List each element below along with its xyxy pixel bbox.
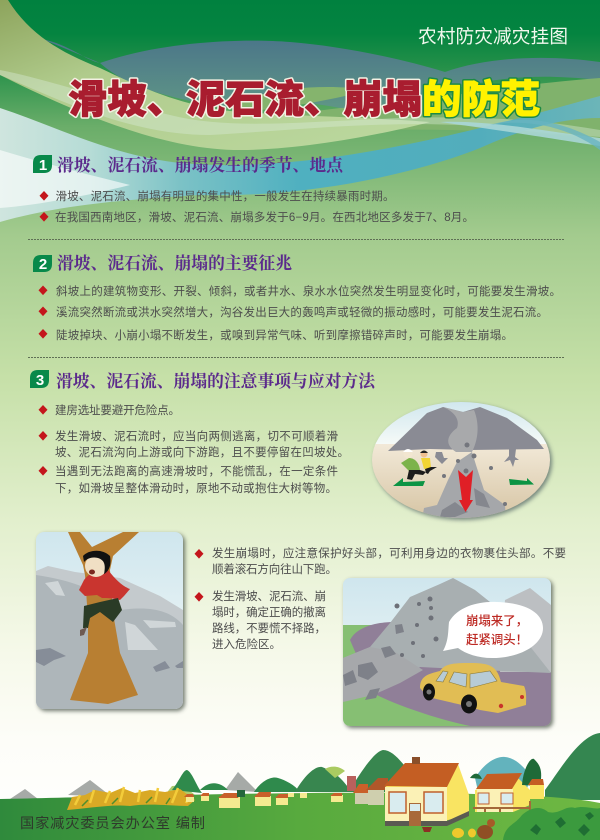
title: 的防范 [422,79,540,122]
small houses [184,776,388,808]
bullets right [194,546,566,651]
bullets 1: 在我国西南地区，滑坡、泥石流、崩塌多发于6−9月。在西北地区多发于7、8月。 [55,210,474,224]
main house [384,757,469,826]
background waves [0,0,600,222]
bullets 2: 斜坡上的建筑物变形、开裂、倾斜，或者井水、泉水水位突然发生明显变化时，可能要发生滑坡。 [56,284,561,298]
heading 1: 滑坡、泥石流、崩塌发生的季节、地点 [57,155,344,175]
section 2 [33,253,561,342]
title: 滑坡、泥石流、崩塌 [68,79,422,122]
section 3 [30,370,376,495]
section 1 [33,155,474,224]
car [420,663,526,714]
bullets 3 left: 下，如滑坡呈整体滑动时，原地不动或抱住大树等物。 [55,481,337,495]
village footer [0,733,600,840]
mountain [36,566,183,709]
bullets 3 left: 当遇到无法跑离的高速滑坡时，不能慌乱，在一定条件 [55,464,338,478]
bullets right: 发生滑坡、泥石流、崩 [212,589,326,603]
debris [422,452,506,520]
bullets 1: 滑坡、泥石流、崩塌有明显的集中性，一般发生在持续暴雨时期。 [56,189,394,203]
badge 1: 1 [39,157,47,174]
boulder figures [435,449,519,467]
bullets 3 left: 发生滑坡、泥石流时，应当向两侧逃离，切不可顺着滑 [55,429,338,443]
road [350,622,551,726]
speech bubble [443,602,543,658]
mud flow [443,407,478,452]
bullets right: 顺着滚石方向往山下跑。 [212,562,337,576]
bullets right: 塌时，确定正确的撤离 [212,605,326,619]
bullets right: 路线，不要慌不择路， [212,621,326,635]
bullets 2 [38,284,561,342]
heading 3: 滑坡、泥石流、崩塌的注意事项与应对方法 [56,371,376,391]
mountain [388,407,544,451]
bullets 3 left [38,403,349,495]
mountain [500,588,551,672]
bullets 3 left: 建房选址要避开危险点。 [55,403,180,417]
second house [470,759,544,817]
bullets 3 left: 坡、泥石流沟向上游或向下游跑，且不要停留在凹坡处。 [55,445,349,459]
green arrow right [509,478,534,485]
speech bubble: 赶紧调头！ [466,632,528,647]
bullets right: 发生崩塌时，应注意保护好头部，可利用身边的衣物裹住头部。不要 [212,546,566,560]
green arrow left [393,478,425,486]
series label: 农村防灾减灾挂图 [418,26,568,47]
bullets 1 [40,189,474,224]
bullets 2: 陡坡掉块、小崩小塌不断发生，或嗅到异常气味、听到摩擦错碎声时，可能要发生崩塌。 [56,328,513,342]
runners [401,449,437,480]
red arrow [458,470,473,512]
title: 滑坡、泥石流、崩塌 [68,79,422,122]
heading 2: 滑坡、泥石流、崩塌的主要征兆 [57,253,292,273]
badge 3 [30,370,49,389]
bullets right: 进入危险区。 [212,637,281,651]
speech bubble: 崩塌来了， [466,613,528,628]
badge 2: 2 [39,256,47,273]
tree [68,532,139,704]
bushes [503,807,600,840]
illustration: hugging a tree [36,532,185,711]
chickens [422,819,495,839]
distant hills [10,733,600,800]
badge 1 [33,155,52,174]
person [79,570,130,600]
badge 3: 3 [36,372,44,389]
illustration: landslide escape [370,400,554,520]
ground [0,793,600,840]
badge 2 [33,255,52,273]
bullets 2: 溪流突然断流或洪水突然增大，沟谷发出巨大的轰鸣声或轻微的振动感时，可能要发生泥石流。 [56,305,548,319]
illustration: car and rockfall [343,578,553,728]
wheat field [67,787,195,810]
credit: 国家减灾委员会办公室 编制 [20,815,205,832]
title: 的防范 [422,79,540,122]
